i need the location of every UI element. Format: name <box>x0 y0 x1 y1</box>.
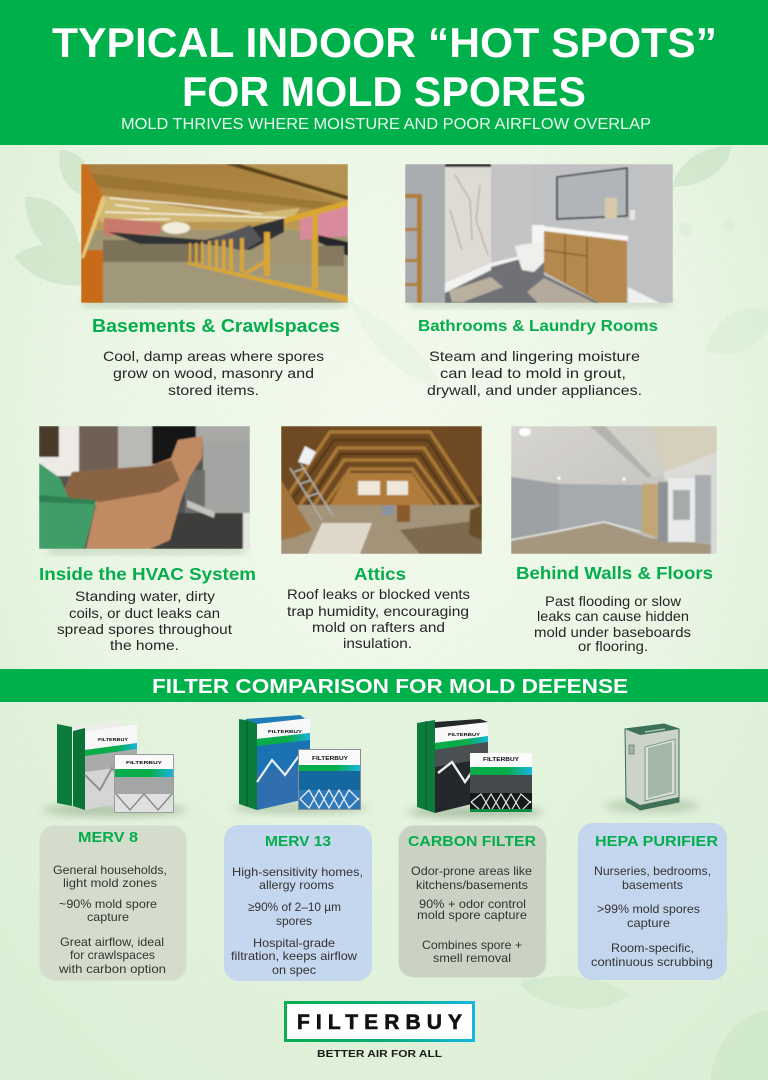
heading: Behind Walls & Floors <box>516 563 713 583</box>
card heading: CARBON FILTER <box>408 833 536 850</box>
card text <box>591 864 713 969</box>
photo: attic rafters <box>281 426 482 554</box>
product: MERV 13 filter boxes: FILTERBUY <box>268 729 303 735</box>
card text: light mold zones <box>63 876 157 890</box>
logo: Filterbuy: BETTER AIR FOR ALL <box>317 1049 442 1060</box>
subtitle: MOLD THRIVES WHERE MOISTURE AND POOR AIRFLOW OVERLAP <box>121 116 651 133</box>
photo: crawlspace <box>81 164 348 303</box>
card text: Nurseries, bedrooms, <box>594 864 711 878</box>
card text: ~90% mold spore <box>59 897 157 911</box>
description: insulation. <box>343 635 412 651</box>
description: mold under baseboards <box>534 624 691 640</box>
card text: mold spore capture <box>417 908 527 922</box>
card text <box>53 863 167 976</box>
header banner <box>0 0 768 145</box>
description: Standing water, dirty <box>75 588 215 604</box>
panel: bathrooms and laundry rooms <box>405 164 673 398</box>
heading: Inside the HVAC System <box>39 564 256 584</box>
card: carbon filter <box>398 826 546 978</box>
description: stored items. <box>168 382 259 398</box>
card text: with carbon option <box>58 962 166 976</box>
card text: Hospital-grade <box>253 936 335 950</box>
card text: kitchens/basements <box>416 878 528 892</box>
card text: continuous scrubbing <box>591 955 713 969</box>
card text: High-sensitivity homes, <box>232 865 363 879</box>
card text: spores <box>276 914 312 928</box>
photo: bathroom <box>405 164 673 303</box>
product: MERV 8 filter boxes <box>43 720 187 817</box>
description <box>427 348 642 398</box>
description: Cool, damp areas where spores <box>103 348 324 364</box>
description: spread spores throughout <box>57 621 232 637</box>
card text: capture <box>87 910 129 924</box>
description: grow on wood, masonry and <box>113 365 314 381</box>
card text: Combines spore + <box>422 938 522 952</box>
description <box>103 348 324 398</box>
photo: finished basement room <box>511 426 717 554</box>
card heading: MERV 8 <box>78 829 138 846</box>
description: mold on rafters and <box>312 619 445 635</box>
card text: for crawlspaces <box>70 948 155 962</box>
card text: capture <box>627 916 670 930</box>
description: trap humidity, encouraging <box>287 603 469 619</box>
product: MERV 8 filter boxes: FILTERBUY <box>98 737 128 742</box>
card heading: MERV 13 <box>265 833 331 850</box>
logo: Filterbuy: FILTERBUY <box>297 1011 462 1034</box>
card text: Odor-prone areas like <box>411 864 532 878</box>
heading: Bathrooms & Laundry Rooms <box>418 318 658 335</box>
description: leaks can cause hidden <box>537 608 689 624</box>
description: can lead to mold in grout, <box>440 365 626 381</box>
card text: ≥90% of 2–10 µm <box>248 900 341 914</box>
heading: Basements & Crawlspaces <box>92 315 340 336</box>
description <box>534 593 691 654</box>
card: MERV 13 <box>224 825 372 981</box>
card text <box>231 865 363 977</box>
product: MERV 13 filter boxes: FILTERBUY <box>312 756 349 762</box>
title <box>52 19 717 115</box>
card text: on spec <box>272 963 316 977</box>
product: MERV 8 filter boxes: FILTERBUY <box>126 760 163 766</box>
description: Steam and lingering moisture <box>429 348 640 364</box>
card text: allergy rooms <box>259 878 334 892</box>
title: FOR MOLD SPORES <box>182 68 586 115</box>
card text: basements <box>622 878 683 892</box>
description <box>287 586 470 651</box>
panel: inside the HVAC system <box>39 426 256 653</box>
title: TYPICAL INDOOR “HOT SPOTS” <box>52 19 717 66</box>
description: the home. <box>110 637 179 653</box>
card heading: HEPA PURIFIER <box>595 833 718 850</box>
product: carbon filter boxes <box>407 719 543 818</box>
product: carbon filter boxes: FILTERBUY <box>448 732 481 738</box>
product: carbon filter boxes: FILTERBUY <box>483 757 520 763</box>
description: Past flooding or slow <box>545 593 682 609</box>
description: Roof leaks or blocked vents <box>287 586 470 602</box>
icon: HEPA air purifier <box>604 724 700 813</box>
card text: smell removal <box>433 951 511 965</box>
panel: behind walls and floors <box>511 426 717 654</box>
panel: attics <box>281 426 482 651</box>
card: MERV 8 <box>40 826 186 980</box>
description <box>57 588 232 653</box>
photo: technician at HVAC unit <box>39 426 250 549</box>
card text: General households, <box>53 863 167 877</box>
logo: Filterbuy <box>286 1002 474 1060</box>
card text <box>411 864 532 965</box>
panel: basements and crawlspaces <box>81 164 348 398</box>
card text: >99% mold spores <box>597 902 700 916</box>
description: or flooring. <box>578 638 648 654</box>
card text: filtration, keeps airflow <box>231 949 357 963</box>
card text: Great airflow, ideal <box>60 935 164 949</box>
description: drywall, and under appliances. <box>427 382 642 398</box>
card: HEPA purifier <box>578 823 727 980</box>
section banner: filter comparison: FILTER COMPARISON FOR MOLD DEFENSE <box>152 675 628 698</box>
card text: Room-specific, <box>611 941 694 955</box>
description: coils, or duct leaks can <box>69 605 220 621</box>
section banner: filter comparison <box>0 669 768 702</box>
product: MERV 13 filter boxes <box>232 715 368 814</box>
heading: Attics <box>354 564 406 584</box>
card text: 90% + odor control <box>419 897 526 911</box>
